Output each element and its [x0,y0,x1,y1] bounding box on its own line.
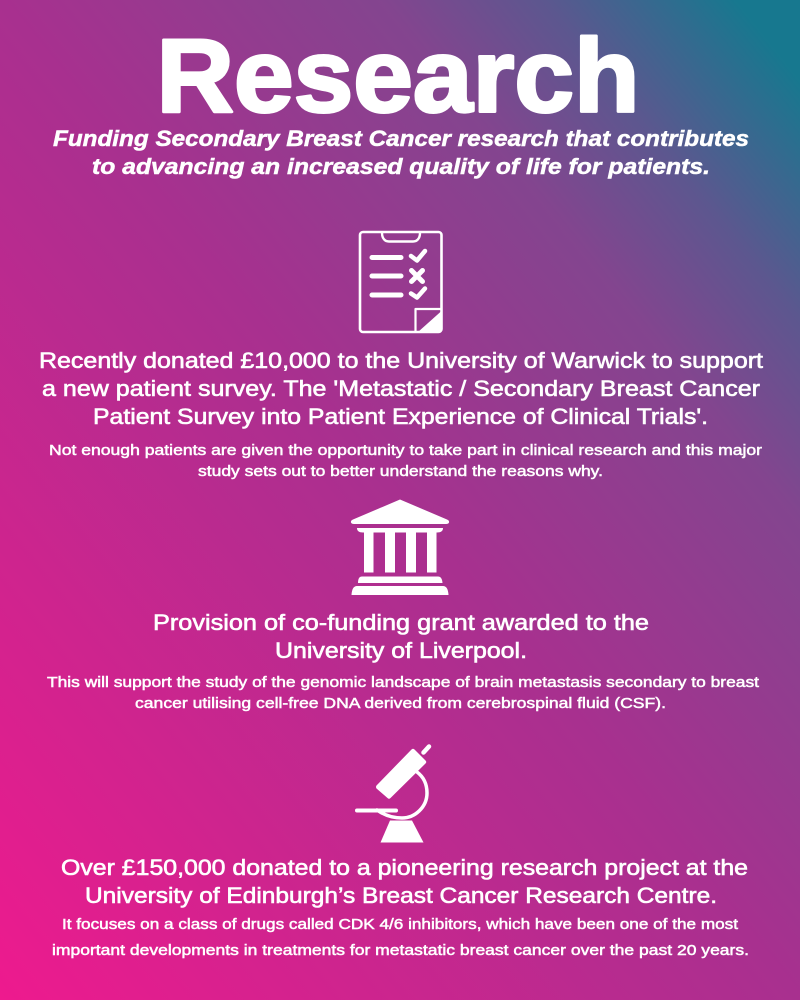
icon: university building [351,500,449,595]
heading: Edinburgh donation: University of Edinburgh’s Breast Cancer Research Centre. [85,883,717,908]
heading: Liverpool grant: Provision of co-funding grant awarded to the [153,610,649,635]
heading: Warwick donation: Patient Survey into Patient Experience of Clinical Trials'. [93,404,708,429]
text: Liverpool detail: This will support the study of the genomic landscape of brain metastasis secondary to breast [47,674,760,691]
text: Warwick detail: study sets out to better understand the reasons why. [198,463,603,480]
heading: Liverpool grant [153,610,649,663]
heading: Edinburgh donation [61,855,748,908]
subtitle: Funding Secondary Breast Cancer research that contributes [53,126,749,151]
icon: microscope [357,746,429,842]
text: Edinburgh detail: important developments in treatments for metastatic breast cancer over the past 20 years. [52,942,749,959]
text: Edinburgh detail: It focuses on a class of drugs called CDK 4/6 inhibitors, which have been one of the most [62,916,739,933]
panel: University of Liverpool grant [47,500,760,712]
panel: University of Edinburgh project [52,746,749,959]
heading: Liverpool grant: University of Liverpool. [275,638,527,663]
heading: Warwick donation: a new patient survey. The 'Metastatic / Secondary Breast Cancer [42,376,760,401]
heading: Edinburgh donation: Over £150,000 donated to a pioneering research project at the [61,855,748,880]
text: Warwick detail [49,442,762,480]
subtitle: to advancing an increased quality of life for patients. [92,154,710,179]
text: Warwick detail: Not enough patients are given the opportunity to take part in clinical research and this major [49,442,762,459]
text: Liverpool detail: cancer utilising cell-free DNA derived from cerebrospinal fluid (CSF). [135,695,666,712]
text: Edinburgh detail [52,916,749,959]
heading: Warwick donation: Recently donated £10,000 to the University of Warwick to support [39,348,763,373]
subtitle [53,126,749,179]
title: Research [156,18,640,134]
icon: clipboard checklist [360,232,442,332]
text: Liverpool detail [47,674,760,712]
panel: University of Warwick survey [39,232,763,480]
heading: Warwick donation [39,348,763,429]
